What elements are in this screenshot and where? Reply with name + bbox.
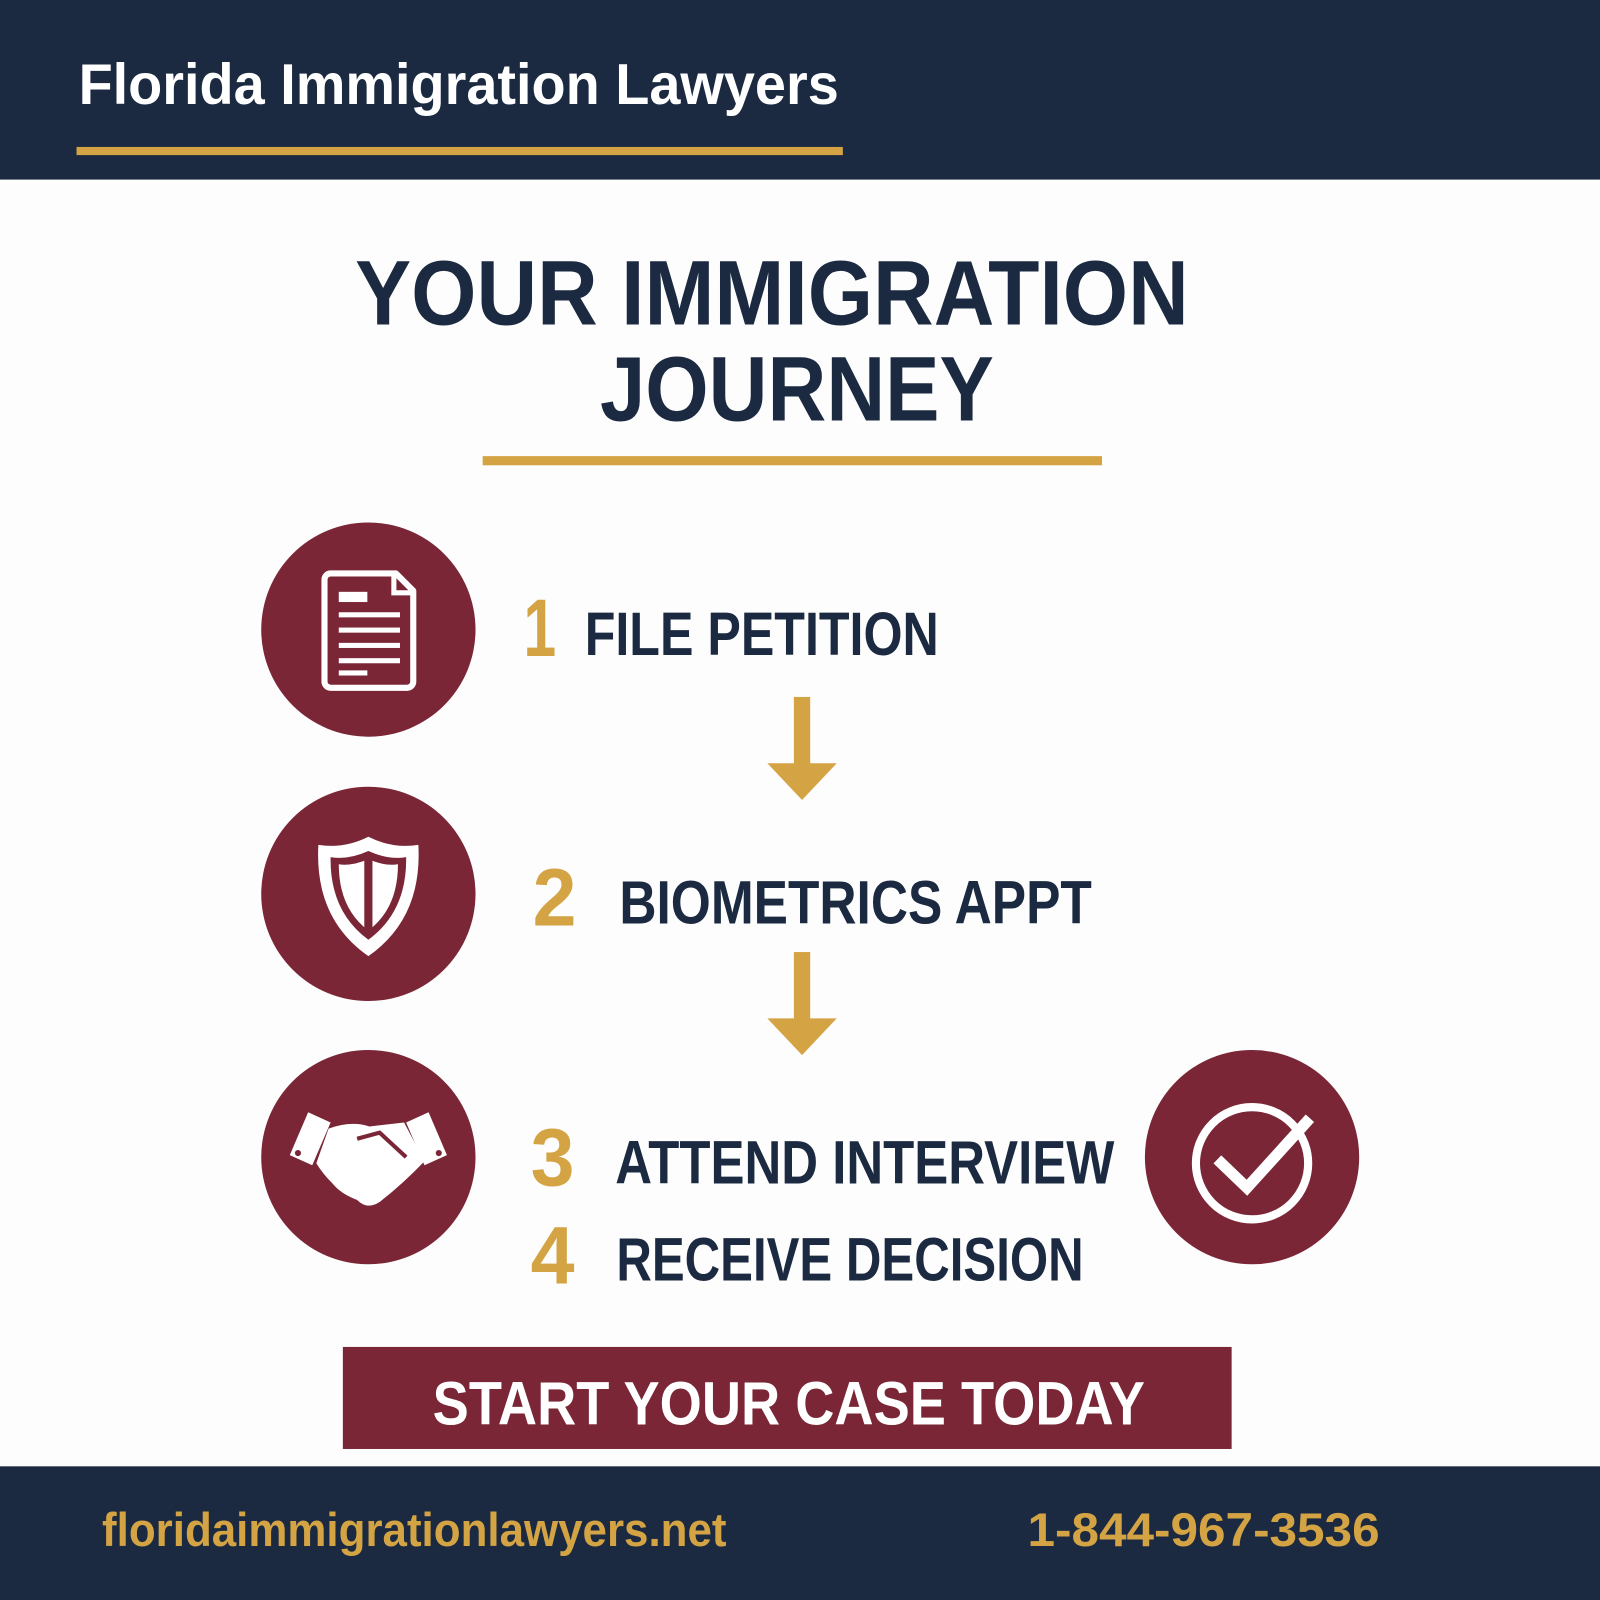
footer phone: 1-844-967-3536 xyxy=(1028,1504,1380,1556)
main title: YOUR IMMIGRATION xyxy=(355,242,1189,344)
arrow 1 xyxy=(767,697,837,800)
step 1: 1 xyxy=(523,583,556,674)
arrow 2 xyxy=(767,952,837,1055)
title gold underline xyxy=(483,456,1102,465)
step 2 xyxy=(533,853,1092,944)
main title xyxy=(355,242,1189,440)
header title: Florida Immigration Lawyers xyxy=(79,53,839,117)
icon: shield xyxy=(261,787,476,1001)
step 4: RECEIVE DECISION xyxy=(616,1226,1084,1294)
step 3: 3 xyxy=(531,1113,574,1204)
step 4: 4 xyxy=(531,1211,574,1302)
step 4 xyxy=(531,1211,1084,1302)
step 1: FILE PETITION xyxy=(585,600,939,668)
call to action button: START YOUR CASE TODAY xyxy=(433,1369,1145,1437)
step 3: ATTEND INTERVIEW xyxy=(615,1129,1114,1197)
icon: checkmark circle xyxy=(1145,1050,1359,1264)
header bar xyxy=(0,0,1600,180)
icon: handshake xyxy=(261,1050,476,1264)
step 1 xyxy=(523,583,939,674)
step 2: BIOMETRICS APPT xyxy=(619,868,1092,936)
footer bar xyxy=(0,1466,1600,1600)
header gold underline xyxy=(77,147,843,155)
main title: JOURNEY xyxy=(600,338,994,440)
step 3 xyxy=(531,1113,1114,1204)
call to action button xyxy=(343,1347,1232,1449)
icon: document xyxy=(261,522,476,737)
step 2: 2 xyxy=(533,853,577,944)
footer website: floridaimmigrationlawyers.net xyxy=(102,1504,727,1556)
